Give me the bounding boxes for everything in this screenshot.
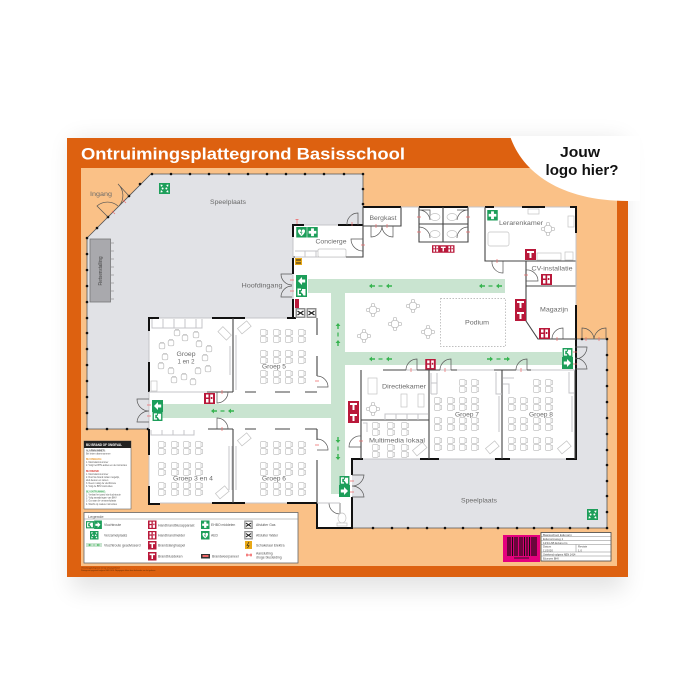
room labels: Directiekamer <box>382 384 427 390</box>
room labels: Groep 3 en 4 <box>173 476 213 482</box>
emergency instructions panel <box>84 441 131 509</box>
emergency instructions panel: 2. Doof de brand indien mogelijk, <box>86 476 120 479</box>
room labels: Speelplaats <box>461 498 497 504</box>
room labels: Groep 7 <box>455 412 479 418</box>
legend: first aid items <box>201 520 235 540</box>
doors <box>137 210 606 514</box>
bicycle shed: Fietsenstalling <box>98 256 104 286</box>
legend: first aid items: AED <box>211 534 219 538</box>
room labels: Groep 8 <box>529 412 553 418</box>
legend: assembly point <box>90 531 127 540</box>
legend: escape route <box>86 520 121 529</box>
legend: fire panel <box>201 554 239 558</box>
furniture: directors office <box>366 378 428 420</box>
podium: Podium <box>465 320 489 326</box>
emergency instructions panel: BIJ ONTRUIMING: <box>86 492 106 494</box>
logo placeholder text: Jouw <box>560 145 601 161</box>
furniture: group 8 <box>503 372 574 454</box>
room labels: CV-installatie <box>532 266 573 272</box>
legend: fire items: Brandblusdeken <box>158 554 183 558</box>
room labels: Multimedia lokaal <box>369 438 425 444</box>
title: Ontruimingsplattegrond Basisschool <box>81 144 405 164</box>
title block: Datum <box>543 544 552 548</box>
electrical switch and valves <box>295 219 316 318</box>
playground area right <box>352 339 607 528</box>
furniture: group 7 <box>431 372 502 454</box>
fence <box>86 173 608 529</box>
emergency instructions panel: Bel intern alarmnummer <box>86 452 111 456</box>
logo corner <box>510 136 640 201</box>
podium <box>440 298 506 346</box>
room labels: Hoofdingang <box>242 282 283 290</box>
furniture: group 6 <box>236 433 306 496</box>
emergency instructions panel: 4. Volg de BHV-instructies <box>86 485 113 488</box>
legend: fire items <box>148 520 194 560</box>
legend: shutoffs: Afsluiter Water <box>256 534 279 538</box>
title block: 1.0 <box>578 548 582 552</box>
poster background <box>67 138 628 577</box>
emergency instructions panel: BIJ BRAND OF ONGEVAL <box>86 443 122 447</box>
emergency instructions panel: 4. Wacht op nadere instructies <box>86 503 118 506</box>
furniture: group 3 and 4 <box>151 430 232 499</box>
small toilet room <box>317 503 347 526</box>
emergency instructions panel: 3. Neem rustig de vluchtroute <box>86 482 117 485</box>
legend: advised escape route: Vluchtroute geadviseerd <box>104 544 141 548</box>
furniture: multimedia room <box>363 422 427 458</box>
poster shadow <box>72 140 624 590</box>
legend: Legende <box>88 514 104 519</box>
building walls <box>149 207 576 528</box>
title block: 1234 AB Edunorm <box>543 541 568 545</box>
room labels: Magazijn <box>540 306 568 314</box>
title block: Revisie <box>578 544 588 548</box>
title block: Edunormweg 1 <box>543 537 564 541</box>
emergency instructions panel: 2. Volg het BHV-advies en de instructies <box>86 464 128 467</box>
title block: 11/2020 <box>543 548 553 552</box>
entrance doors <box>97 184 129 217</box>
furniture: concierge <box>295 249 346 257</box>
room labels: Speelplaats <box>210 199 246 206</box>
furniture: teachers room <box>488 209 574 260</box>
legend: first aid items: EHBO middelen <box>211 523 235 527</box>
emergency instructions panel: 1. Meld alarmnummer <box>86 473 109 476</box>
outer black walls <box>149 207 576 528</box>
room labels <box>173 199 573 504</box>
legend: advised escape route <box>86 543 141 548</box>
fine print: Ontruimingsplattegrond, niet op schaal getekend <box>81 566 120 570</box>
room labels: Concierge <box>316 238 347 246</box>
main hall tables <box>357 299 435 343</box>
logo placeholder text: logo hier? <box>546 163 619 179</box>
room labels: Groep 6 <box>262 476 286 482</box>
legend: shutoffs: Schakelaar Elektra <box>256 544 285 548</box>
room labels: Groep <box>176 351 196 358</box>
legend: escape route: Vluchtroute <box>104 523 121 527</box>
legend: assembly point: Verzamelplaats <box>104 534 127 538</box>
legend: fire items: Handbrandmelder <box>158 534 186 538</box>
fine print <box>81 566 156 572</box>
bicycle shed <box>90 239 114 302</box>
fire safety signs <box>204 245 552 423</box>
route direction arrows <box>211 284 510 460</box>
legend: shutoffs <box>244 520 285 549</box>
emergency instructions panel: 2. Volg aanwijzingen van BHV <box>86 498 117 500</box>
emergency instructions panel: 1. Meld alarmnummer <box>86 461 109 464</box>
room labels: Groep 5 <box>262 364 286 370</box>
escape route corridors <box>160 279 562 494</box>
legend: fire items: Brandslanghaspel <box>158 544 185 548</box>
first aid and AED signs <box>296 210 498 238</box>
room labels: Bergkast <box>370 215 397 222</box>
emergency instructions panel: BIJ BRAND: <box>86 470 100 473</box>
room labels: 1 en 2 <box>178 358 195 366</box>
emergency instructions panel: 3. Ga naar de verzamelplaats <box>86 500 117 502</box>
legend <box>84 512 298 563</box>
emergency instructions panel: 1. Verlaat het pand via vluchtroute <box>86 494 121 496</box>
toilets <box>430 214 457 238</box>
building floor <box>149 207 576 528</box>
legend: dry riser <box>246 552 282 560</box>
light interior walls <box>149 207 576 503</box>
emergency instructions panel: sluit deuren en ramen <box>86 479 109 482</box>
emergency instructions panel: ALARMNUMMER: <box>86 450 106 452</box>
title block: Edunorm BHV <box>543 558 559 560</box>
furniture: group 1 and 2 <box>151 319 231 391</box>
exit signs <box>152 275 573 497</box>
room labels: Lerarenkamer <box>499 220 544 227</box>
legend: shutoffs: Afsluiter Gas <box>256 523 276 527</box>
furniture: group 5 <box>230 321 306 390</box>
label: Ingang: Ingang <box>90 191 113 198</box>
legend: dry riser: droge blusleiding <box>256 556 282 560</box>
peach map area <box>81 168 617 566</box>
fine print: Plattegrond opgesteld volgens NEN 1414. Wijzigingen alleen door beheerder van het gebouw <box>81 569 156 572</box>
legend: dry riser: Aansluiting <box>256 552 273 556</box>
playground area <box>87 174 363 429</box>
title block: Basisschool Edunorm <box>543 533 573 537</box>
assembly points <box>159 183 598 520</box>
legend: fire items: Handbrandblusapparaat <box>158 524 194 528</box>
title block <box>541 532 611 561</box>
legend: fire panel: Brandweerpaneel <box>212 554 239 558</box>
emergency instructions panel: BIJ ONGEVAL: <box>86 458 102 461</box>
title block: Getekend volgens NEN 1414 <box>543 554 576 556</box>
interior dark walls <box>207 207 576 503</box>
barcode sticker <box>503 535 540 562</box>
